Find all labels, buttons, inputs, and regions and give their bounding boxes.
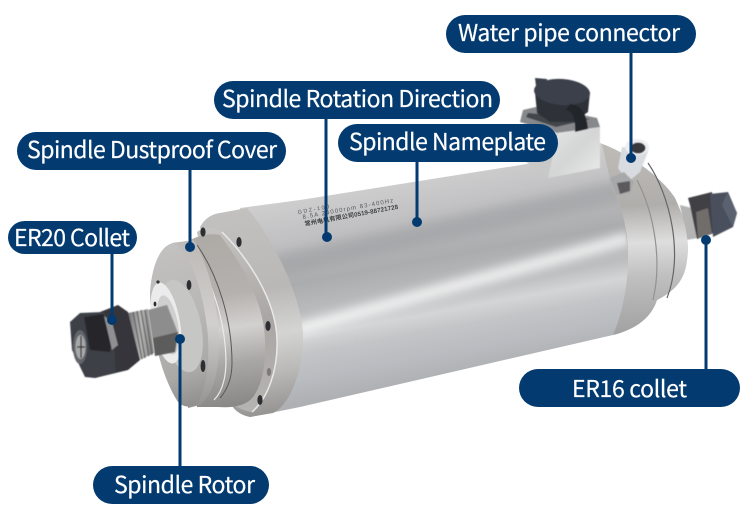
callout: ER16 collet: ER16 collet <box>572 370 687 404</box>
rear band seams <box>637 180 657 300</box>
icon: water port housing <box>510 77 600 178</box>
large front flange band <box>200 208 303 417</box>
flange bolts <box>154 227 271 405</box>
rear end band <box>602 144 688 335</box>
callout: ER16 collet <box>519 235 740 407</box>
callout: Spindle Rotation Direction: Spindle Rotation Direction <box>222 80 493 114</box>
groove line on stepped ring <box>197 245 232 398</box>
icon: rear ER16 collet <box>680 192 737 240</box>
callout: Spindle Dustproof Cover: Spindle Dustproof Cover <box>27 131 277 165</box>
rotor seat plate <box>145 280 187 366</box>
callout: Water pipe connector <box>446 14 696 163</box>
rotor boss <box>152 276 210 376</box>
callout: ER20 Collet <box>8 219 137 325</box>
main cylinder body <box>240 143 688 417</box>
callout: Spindle Rotor: Spindle Rotor <box>114 466 255 500</box>
callout: Spindle Rotation Direction <box>214 80 500 242</box>
spindle motor illustration <box>70 77 737 417</box>
nameplate engraving: 8.5A 24000rpm 83-400Hz <box>302 198 394 221</box>
callout: Spindle Nameplate: Spindle Nameplate <box>349 123 546 157</box>
flange front face <box>197 228 277 412</box>
callout: Spindle Nameplate <box>338 123 558 227</box>
callout: ER20 Collet: ER20 Collet <box>14 219 130 253</box>
dustproof cover face <box>150 243 208 406</box>
nameplate engraving: GDZ-100 <box>297 204 330 216</box>
nameplate engraving: 常州电机有限公司0519-88721728 <box>304 203 399 228</box>
body shading and highlight <box>250 190 630 330</box>
stepped ring <box>190 234 265 407</box>
icon: ER20 collet with thread <box>70 305 154 378</box>
icon: front shaft <box>148 305 178 356</box>
icon: water pipe elbow connector <box>610 139 649 195</box>
dustproof cover side <box>172 240 219 408</box>
callout: Spindle Dustproof Cover <box>17 131 286 252</box>
callout: Water pipe connector: Water pipe connector <box>458 14 680 48</box>
callout: Spindle Rotor <box>93 334 269 504</box>
